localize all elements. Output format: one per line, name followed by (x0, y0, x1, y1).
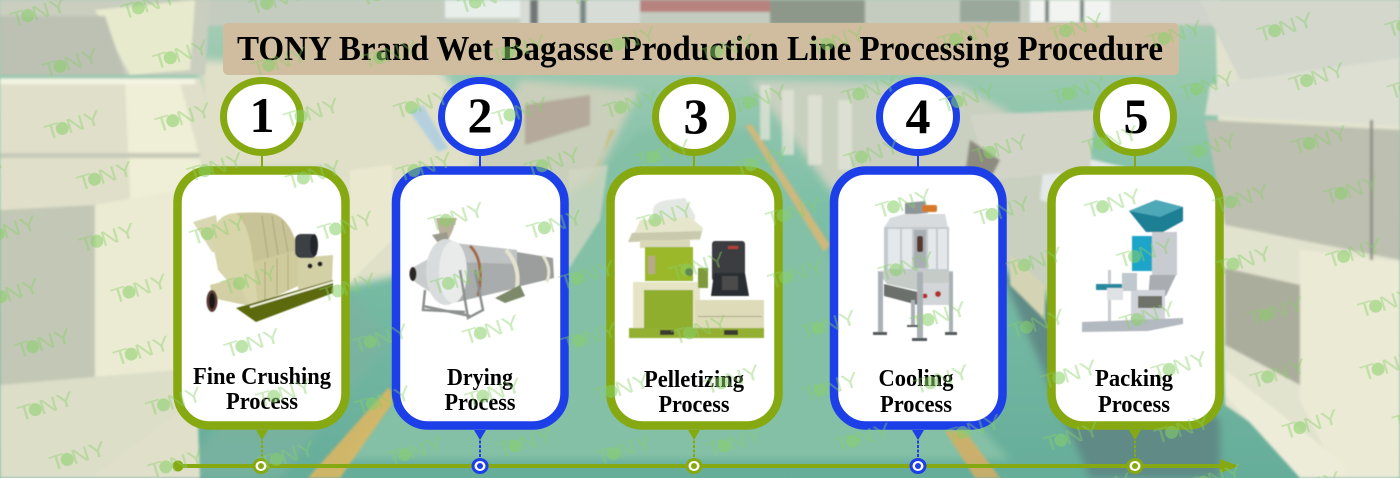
icon: rotary drum dryer (410, 218, 554, 318)
step 5 number badge: 5 (1124, 88, 1148, 144)
panel: fine crushing (178, 170, 346, 426)
factory roof and windows (180, 0, 1220, 26)
label: packing process (1095, 366, 1173, 418)
icon: packing scale (1082, 200, 1183, 332)
drop lines to timeline (256, 430, 1141, 458)
label: pelletizing process: Pelletizing (644, 367, 744, 393)
step connectors from number badges to cards (262, 156, 1135, 167)
label: pelletizing process: Process (658, 392, 730, 418)
step 2 number badge (442, 80, 518, 152)
label: drying process: Process (444, 390, 516, 416)
label: drying process (444, 365, 516, 416)
mid background machines (350, 85, 1140, 320)
label: fine crushing process (193, 364, 331, 415)
label: cooling process (878, 366, 954, 418)
step 5 number badge (1096, 80, 1174, 152)
label: cooling process: Process (880, 392, 952, 418)
step 3 number badge: 3 (684, 88, 708, 144)
right large machine (1200, 0, 1400, 478)
panel: drying (396, 170, 564, 426)
label: packing process: Process (1098, 392, 1170, 418)
step 1 number badge: 1 (250, 87, 274, 143)
label: drying process: Drying (447, 365, 513, 391)
timeline with arrow and step nodes (172, 430, 1239, 473)
label: fine crushing process: Process (226, 389, 298, 415)
icon: counterflow cooler (873, 201, 957, 341)
panel: packing (1052, 170, 1220, 426)
yellow floor lanes (308, 125, 1000, 478)
label: cooling process: Cooling (878, 366, 954, 392)
left large machine (0, 0, 220, 478)
step 4 number badge: 4 (906, 88, 930, 144)
icon: pellet mill (628, 198, 764, 338)
label: fine crushing process: Fine Crushing (193, 364, 331, 390)
label: packing process: Packing (1095, 366, 1173, 392)
step 3 number badge (656, 80, 732, 152)
title text: TONY Brand Wet Bagasse Production Line Processing Procedure (237, 29, 1163, 68)
icon: hammer mill crusher (193, 212, 333, 322)
step 4 number badge (880, 80, 956, 152)
panel: pelletizing (610, 170, 778, 426)
step 1 number badge (224, 80, 300, 152)
panel: cooling (834, 170, 1002, 426)
label: pelletizing process (644, 367, 744, 418)
timeline nodes (254, 460, 1142, 472)
step 2 number badge: 2 (468, 87, 492, 143)
title bar (223, 23, 1179, 75)
